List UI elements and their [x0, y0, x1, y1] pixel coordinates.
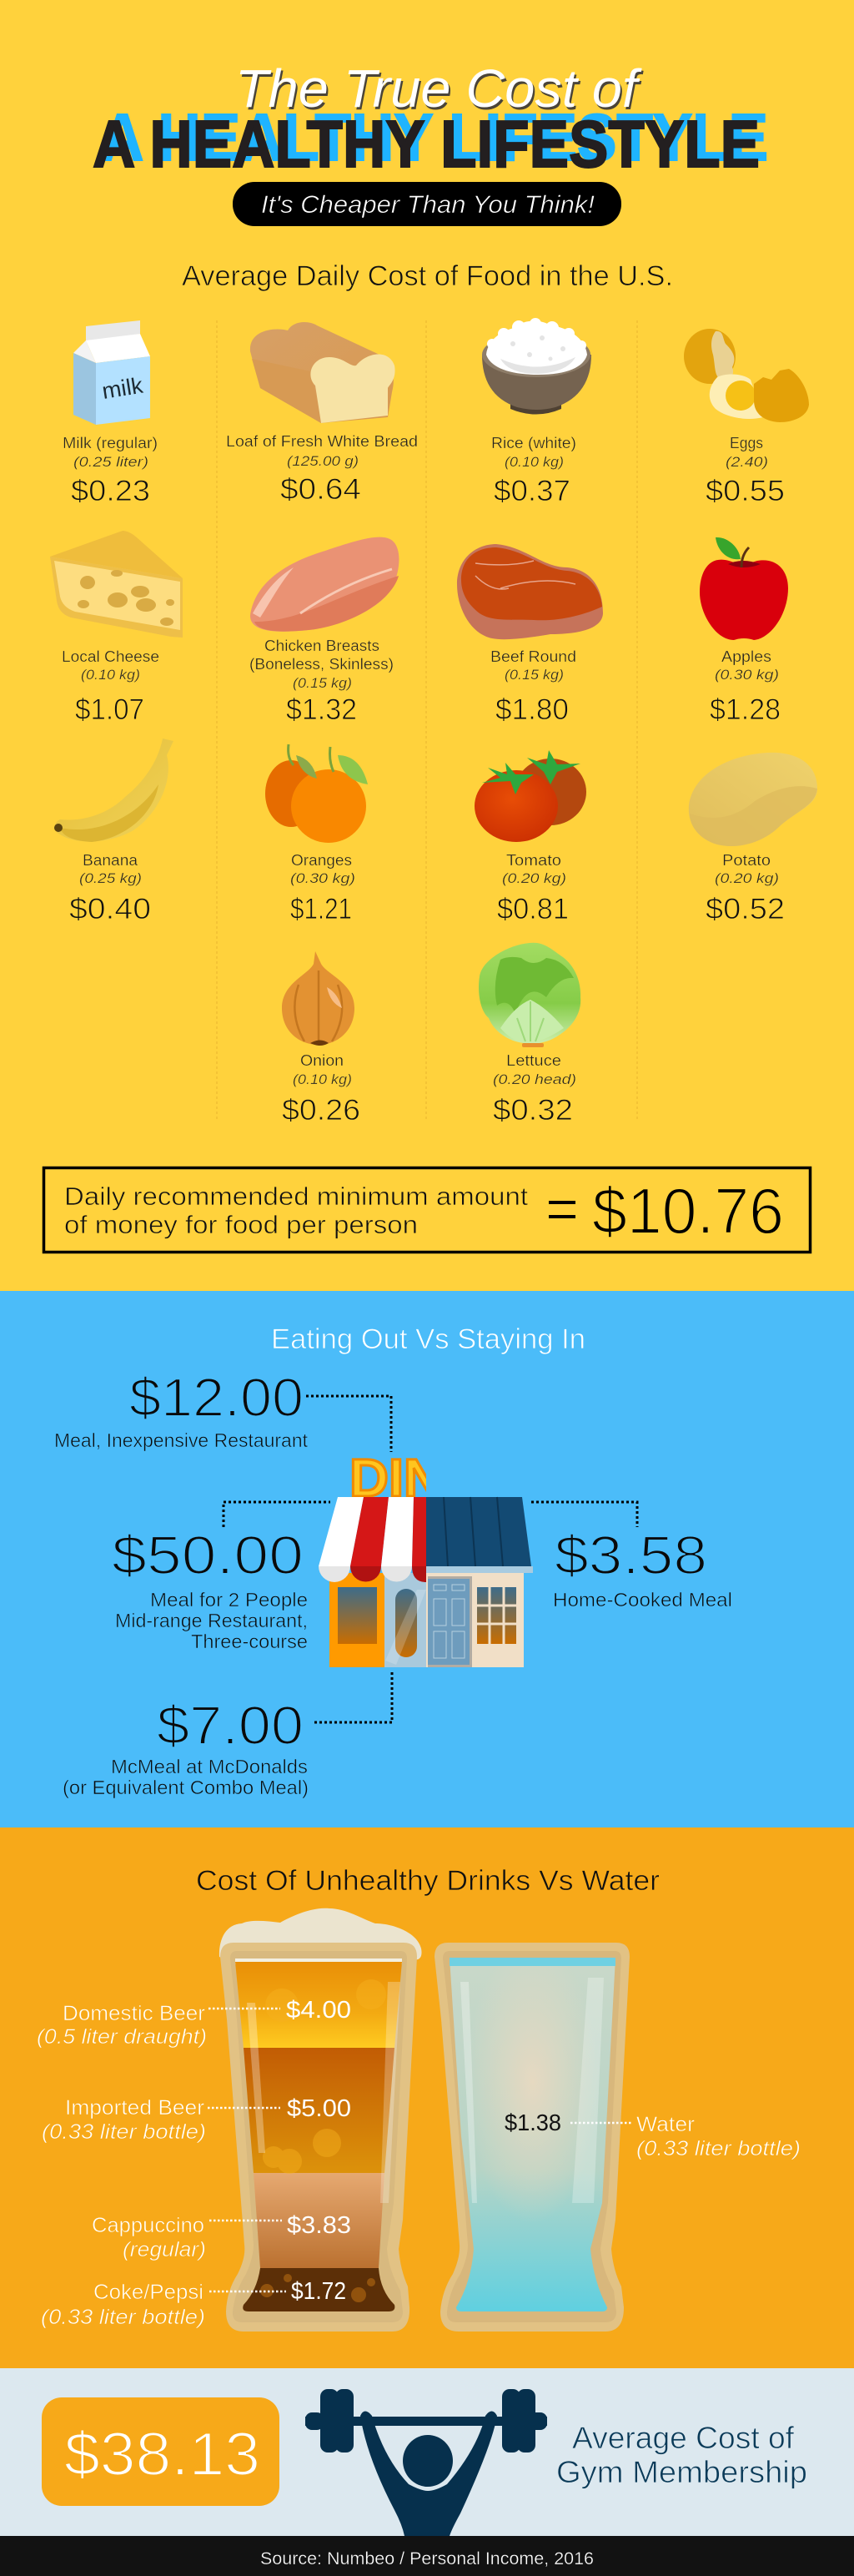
icon: tomatoes [475, 750, 586, 842]
house roof [426, 1497, 531, 1566]
item: beef [457, 544, 603, 726]
item: oranges: $1.21 [290, 893, 352, 925]
item: bread: Loaf of Fresh White Bread [226, 433, 418, 450]
icon: beef steak [457, 544, 603, 639]
item: chicken [249, 537, 399, 726]
label: coke: Coke/Pepsi [93, 2281, 203, 2304]
item: bread: (125.00 g) [287, 453, 359, 469]
stat: inexpensive restaurant [54, 1367, 309, 1451]
label: cappuccino [92, 2214, 206, 2261]
chart: beer glass: $4.00 [286, 1997, 351, 2024]
item: beef: Beef Round [490, 648, 576, 665]
house wall [426, 1573, 524, 1667]
label: water: Water [636, 2113, 695, 2136]
chart: water glass [435, 1943, 630, 2332]
stat: mcmeal [63, 1695, 309, 1798]
label: cappuccino: Cappuccino [92, 2214, 204, 2237]
icon: cheese wedge [50, 531, 183, 638]
item: onion: (0.10 kg) [293, 1071, 352, 1087]
item: potato: Potato [722, 852, 771, 869]
yellow background panel [0, 0, 854, 1291]
label: cappuccino: (regular) [123, 2238, 206, 2261]
callout: daily minimum [43, 1168, 811, 1252]
item: milk: $0.23 [71, 475, 150, 507]
icon: weightlifter [305, 2389, 547, 2536]
item: onion: Onion [300, 1052, 344, 1069]
chart: beer glass: $3.83 [287, 2212, 351, 2239]
item: onion: $0.26 [282, 1094, 360, 1127]
item: banana: $0.40 [69, 893, 151, 925]
cappuccino layer [254, 2173, 384, 2268]
item: banana: (0.25 kg) [79, 870, 142, 886]
item: potato: $0.52 [706, 893, 785, 925]
footer bar [0, 2536, 854, 2576]
subtitle pill: It's Cheaper Than You Think! [261, 191, 595, 219]
item: cheese [50, 531, 183, 726]
title: A HEALTHY LIFESTYLE [93, 107, 760, 181]
domestic beer layer [235, 1962, 402, 2048]
item: banana [54, 739, 173, 925]
footer source text: Source: Numbeo / Personal Income, 2016 [260, 2549, 594, 2568]
chart: water glass: $1.38 [505, 2110, 561, 2135]
title: The True Cost of [235, 58, 642, 118]
item: potato [689, 753, 817, 925]
icon: banana [54, 739, 173, 842]
icon: rice bowl [482, 318, 591, 414]
heading: average daily cost: Average Daily Cost of Food in the U.S. [182, 260, 673, 292]
stat: mid-range restaurant: Meal for 2 People [150, 1589, 308, 1611]
gym caption: Gym Membership [556, 2455, 807, 2489]
label: water: (0.33 liter bottle) [636, 2137, 801, 2160]
label: coke [41, 2281, 205, 2329]
item: chicken: Chicken Breasts [264, 638, 379, 654]
item: onion [282, 951, 360, 1127]
icon: potato [689, 753, 817, 846]
gym caption [556, 2421, 807, 2489]
item: oranges: (0.30 kg) [290, 870, 355, 886]
bubbles [263, 1979, 386, 2174]
label: imported beer: Imported Beer [65, 2096, 204, 2120]
item: rice: (0.10 kg) [505, 454, 564, 470]
chart: beer glass [219, 1908, 422, 2332]
orange background panel [0, 1827, 854, 2368]
badge: gym cost: $38.13 [64, 2421, 260, 2488]
item: rice: $0.37 [494, 475, 570, 507]
item: eggs: $0.55 [706, 475, 785, 507]
stat: mcmeal: $7.00 [157, 1695, 304, 1756]
house window [477, 1587, 516, 1644]
icon: milk carton [73, 320, 150, 425]
pale gym background panel [0, 2368, 854, 2536]
item: milk: Milk (regular) [63, 435, 158, 451]
label: imported beer [42, 2096, 206, 2144]
item: oranges [265, 744, 368, 925]
item: bread: $0.64 [280, 473, 361, 506]
badge: gym cost [42, 2397, 279, 2506]
item: cheese: $1.07 [75, 693, 144, 726]
glass highlights [247, 2003, 265, 2153]
item: chicken: $1.32 [286, 693, 357, 726]
restaurant wall [329, 1573, 384, 1667]
item: milk: (0.25 liter) [73, 454, 148, 470]
blue background panel [0, 1291, 854, 1827]
label: domestic beer: Domestic Beer [63, 2002, 205, 2025]
house door [428, 1576, 472, 1667]
icon: oranges [265, 744, 368, 843]
icon: restaurant and house [319, 1448, 533, 1667]
icon: milk carton: milk [100, 373, 145, 404]
stat: mid-range restaurant: $50.00 [112, 1525, 304, 1585]
stat: home-cooked meal: Home-Cooked Meal [553, 1589, 732, 1611]
item: tomato: (0.20 kg) [502, 870, 566, 886]
icon: onion [282, 951, 354, 1046]
item: chicken: (0.15 kg) [293, 675, 352, 691]
stat: mcmeal: (or Equivalent Combo Meal) [63, 1777, 309, 1798]
item: cheese: Local Cheese [62, 648, 159, 665]
item: bread [226, 322, 418, 506]
callout: daily minimum: of money for food per person [64, 1210, 418, 1239]
item: tomato [475, 750, 586, 925]
stat: home-cooked meal: $3.58 [555, 1525, 707, 1585]
item: beef: (0.15 kg) [505, 667, 564, 683]
item: chicken: (Boneless, Skinless) [249, 656, 394, 673]
callout: daily minimum: $10.76 [592, 1174, 784, 1248]
item: lettuce: Lettuce [506, 1052, 561, 1069]
white dotted leaders [208, 2009, 631, 2291]
label: domestic beer: (0.5 liter draught) [37, 2025, 207, 2049]
item: rice [482, 318, 591, 507]
item: cheese: (0.10 kg) [81, 667, 140, 683]
title [93, 58, 760, 181]
callout: daily minimum: Daily recommended minimum amount [64, 1182, 528, 1211]
item: apples: $1.28 [710, 693, 781, 726]
item: tomato: $0.81 [497, 893, 569, 925]
foam [219, 1908, 422, 1959]
icon: cracked eggs [684, 329, 809, 422]
stat: mcmeal: McMeal at McDonalds [111, 1756, 308, 1777]
awning [319, 1497, 426, 1582]
item: lettuce [479, 943, 580, 1127]
heading: eating out: Eating Out Vs Staying In [271, 1323, 585, 1355]
glass outline [220, 1943, 417, 2332]
gym caption: Average Cost of [572, 2421, 795, 2455]
dotted connectors [224, 1396, 637, 1722]
stat: mid-range restaurant: Three-course [191, 1631, 308, 1652]
stat: mid-range restaurant [112, 1525, 308, 1652]
stat: home-cooked meal [553, 1525, 732, 1611]
chart: beer glass: $1.72 [291, 2278, 346, 2305]
icon: bread loaf [250, 322, 395, 423]
label: domestic beer [37, 2002, 207, 2049]
item: lettuce: $0.32 [493, 1094, 573, 1127]
icon: chicken breast [250, 537, 399, 632]
item: tomato: Tomato [506, 852, 561, 869]
item: apples: Apples [721, 648, 771, 665]
sign: DIN [349, 1448, 443, 1508]
item: beef: $1.80 [495, 693, 569, 726]
label: imported beer: (0.33 liter bottle) [42, 2120, 206, 2144]
item: eggs: (2.40) [726, 454, 768, 470]
item: apples: (0.30 kg) [715, 667, 779, 683]
stat: inexpensive restaurant: Meal, Inexpensive Restaurant [54, 1429, 309, 1451]
item: eggs: Eggs [730, 435, 763, 451]
item: eggs [684, 329, 809, 507]
label: coke: (0.33 liter bottle) [41, 2306, 205, 2329]
item: banana: Banana [83, 852, 138, 869]
item: potato: (0.20 kg) [715, 870, 779, 886]
subtitle pill [233, 182, 621, 226]
icon: lettuce [479, 943, 580, 1047]
stat: inexpensive restaurant: $12.00 [129, 1367, 304, 1428]
cola layer [243, 2268, 394, 2311]
heading: drinks vs water: Cost Of Unhealthy Drinks Vs Water [196, 1865, 660, 1897]
item: milk [63, 320, 158, 507]
item: apples [700, 537, 788, 726]
stat: mid-range restaurant: Mid-range Restaurant, [115, 1610, 308, 1631]
item: oranges: Oranges [291, 852, 352, 869]
imported beer layer [244, 2048, 394, 2173]
item: lettuce: (0.20 head) [493, 1071, 576, 1087]
chart: beer glass: $5.00 [287, 2095, 351, 2122]
icon: red apple [700, 537, 788, 640]
item: rice: Rice (white) [491, 435, 576, 451]
label: water [636, 2113, 801, 2160]
